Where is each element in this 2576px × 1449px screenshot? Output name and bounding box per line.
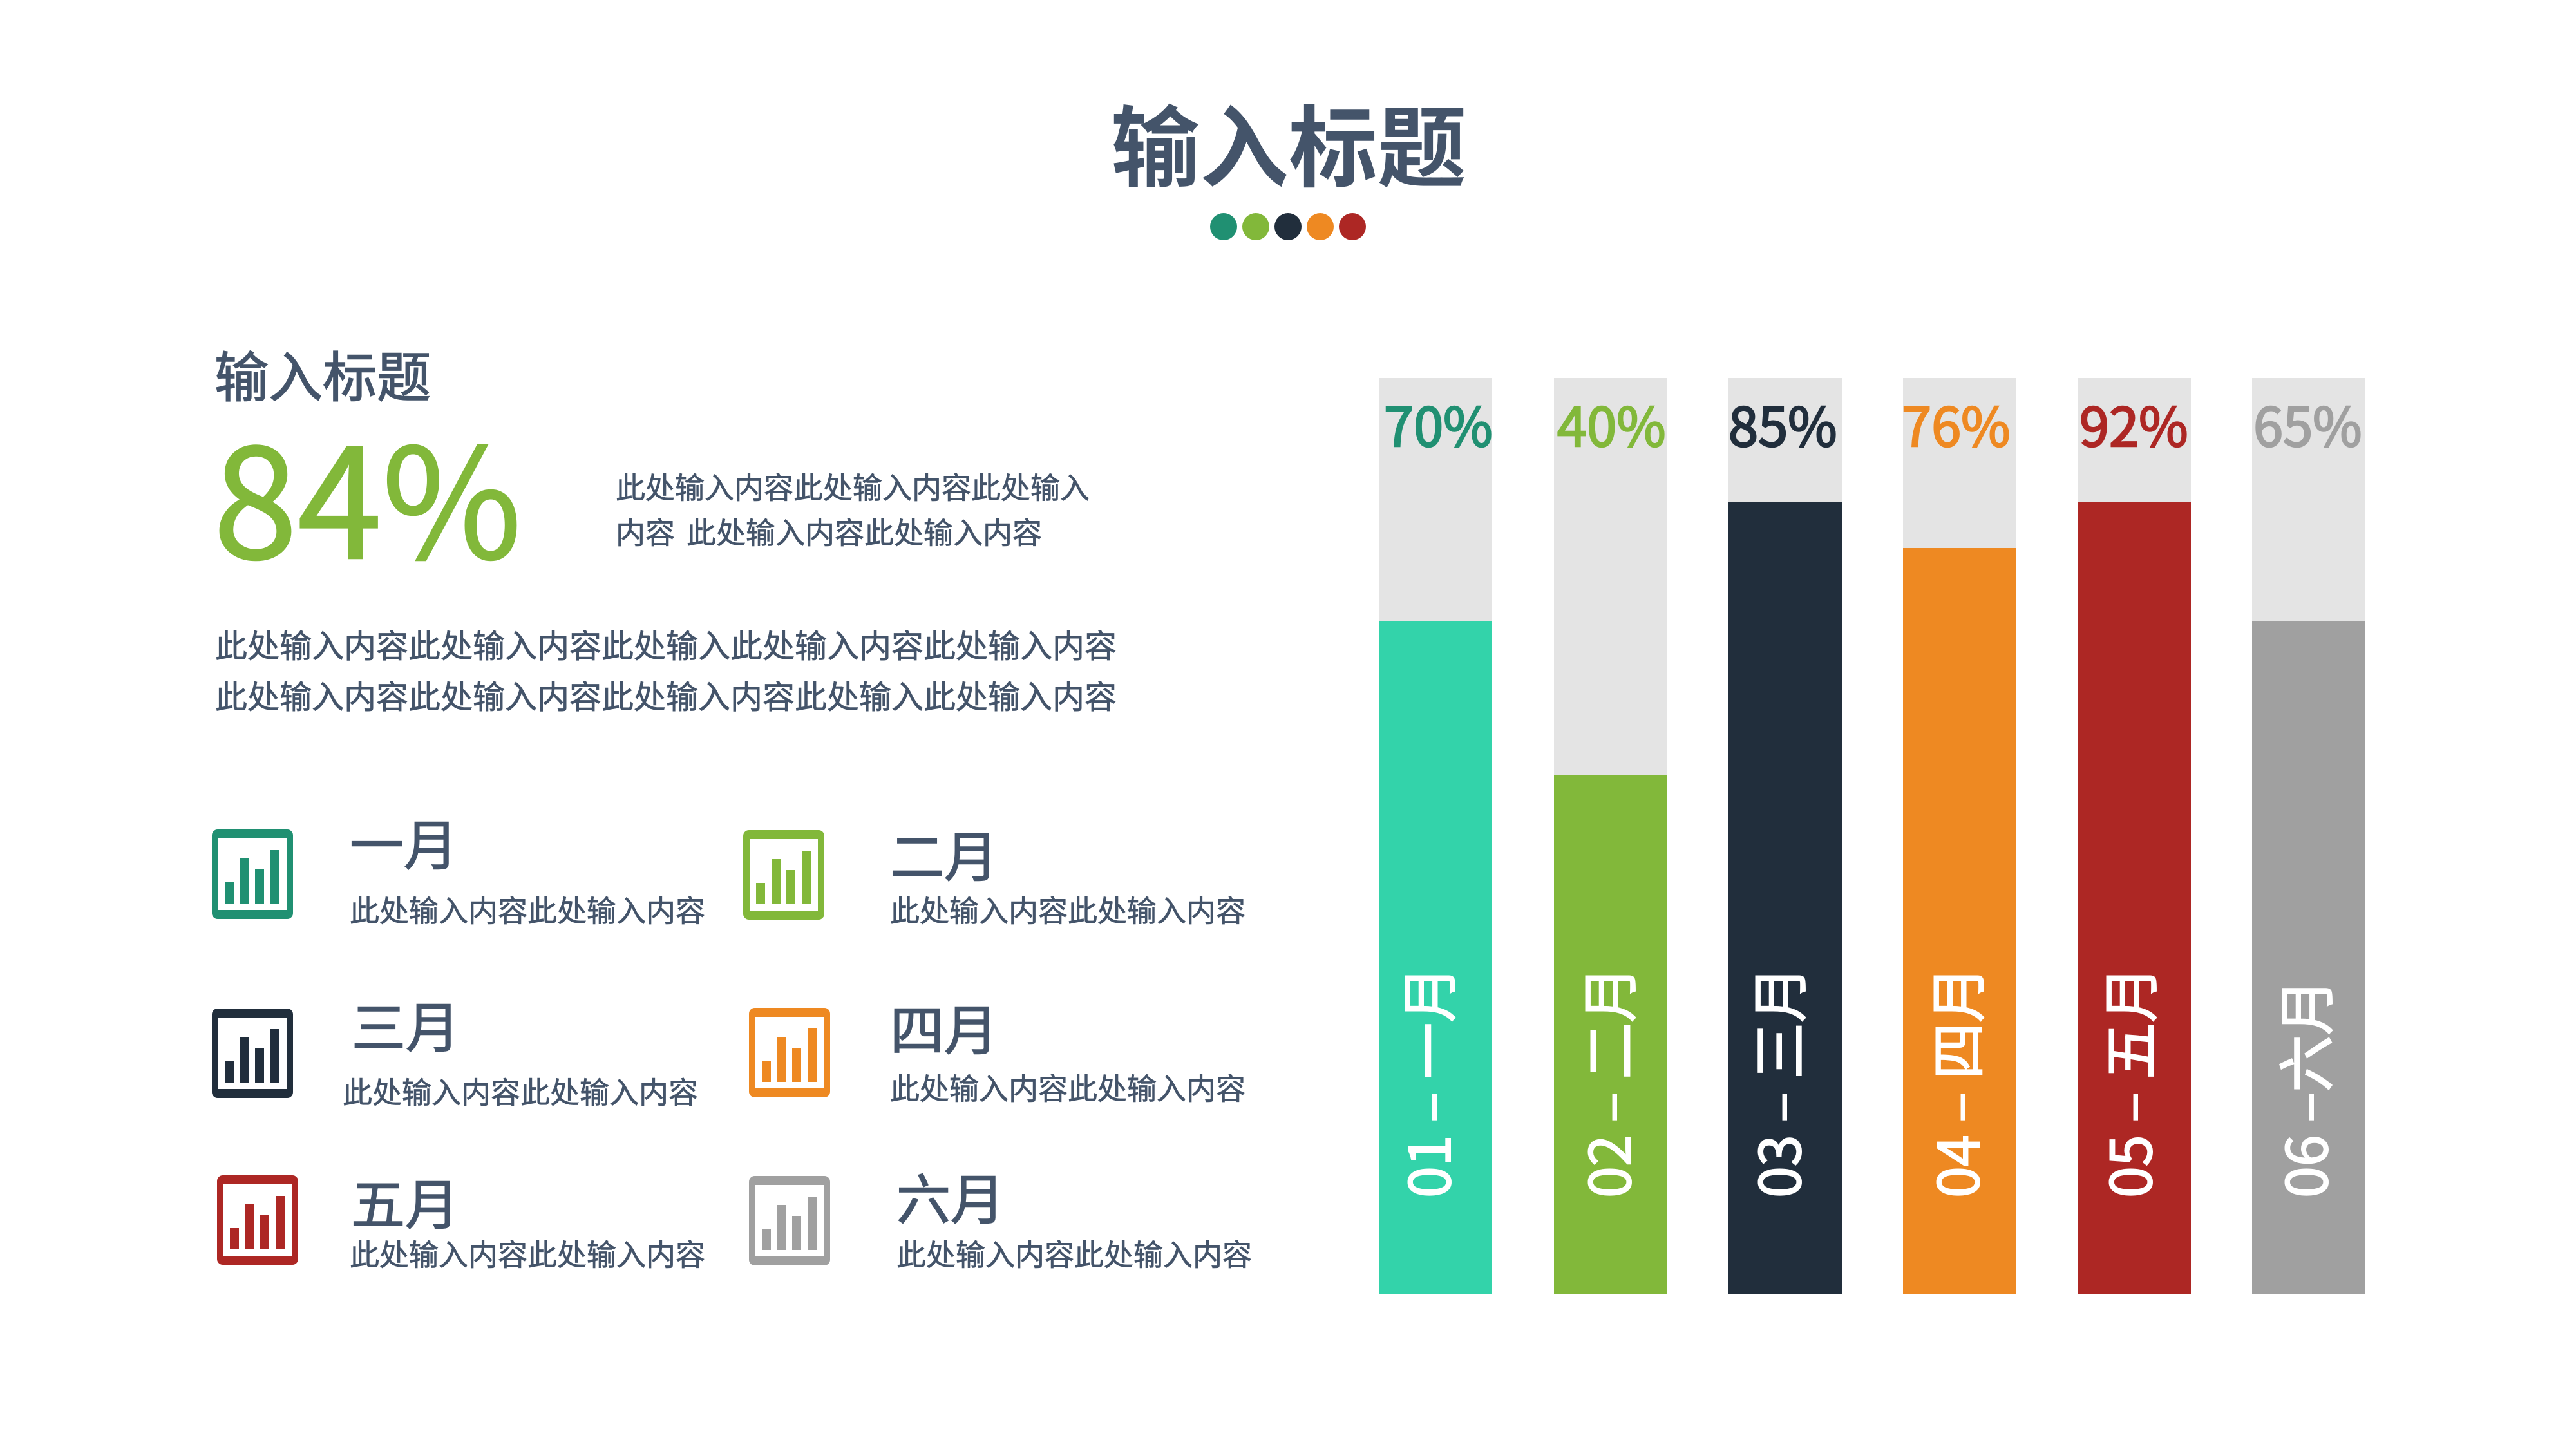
bar: February xyxy=(1554,378,1667,1294)
title: 输入标题 xyxy=(1111,77,1466,205)
bar: April xyxy=(1902,378,2016,1294)
title dots xyxy=(1210,213,1366,240)
body paragraph: 此处输入内容此处输入内容此处输入此处输入内容此处输入内容 xyxy=(215,621,1117,667)
May description: 此处输入内容此处输入内容 xyxy=(350,1232,705,1274)
bar: January xyxy=(1379,378,1493,1294)
bar: May: 92% xyxy=(2079,384,2188,462)
bar: April: 76% xyxy=(1902,384,2011,462)
January description: 此处输入内容此处输入内容 xyxy=(350,888,705,931)
bar: February: 40% xyxy=(1557,384,1666,462)
bar: May xyxy=(2078,378,2191,1294)
body paragraph xyxy=(215,621,1117,718)
February heading: 二月 xyxy=(890,815,998,893)
icon: April chart xyxy=(749,1008,830,1097)
bar: March xyxy=(1728,378,1842,1294)
May heading: 五月 xyxy=(351,1162,459,1240)
April description: 此处输入内容此处输入内容 xyxy=(890,1066,1245,1108)
stat description: 内容 此处输入内容此处输入内容 xyxy=(616,510,1042,553)
icon: May chart xyxy=(217,1175,298,1265)
stat description xyxy=(616,465,1090,553)
bar: January: 01 – 一月 xyxy=(1385,966,1467,1198)
bar: March: 85% xyxy=(1728,384,1837,462)
bar: January: 70% xyxy=(1384,384,1493,462)
icon: January chart xyxy=(212,829,293,919)
body paragraph: 此处输入内容此处输入内容此处输入内容此处输入此处输入内容 xyxy=(215,672,1117,718)
panel: left summary xyxy=(213,335,1117,718)
March description: 此处输入内容此处输入内容 xyxy=(343,1070,698,1112)
icon: February chart xyxy=(743,830,824,920)
February description: 此处输入内容此处输入内容 xyxy=(890,888,1245,931)
bar: June: 65% xyxy=(2253,384,2362,462)
icon: June chart xyxy=(749,1176,830,1265)
bar: June xyxy=(2252,378,2365,1294)
bar: March: 03 – 三月 xyxy=(1736,966,1817,1198)
bar: May: 05 – 五月 xyxy=(2087,966,2168,1198)
April heading: 四月 xyxy=(890,988,998,1066)
panel: month legend xyxy=(212,803,1252,1274)
June description: 此处输入内容此处输入内容 xyxy=(896,1232,1252,1274)
January heading: 一月 xyxy=(350,803,458,881)
subheading: 输入标题 xyxy=(214,335,431,413)
big stat: 84% xyxy=(213,382,522,602)
March heading: 三月 xyxy=(352,985,460,1063)
bar chart xyxy=(1379,378,2365,1294)
June heading: 六月 xyxy=(896,1157,1005,1235)
bar: February: 02 – 二月 xyxy=(1566,966,1647,1198)
icon: March chart xyxy=(212,1009,293,1098)
bar: April: 04 – 四月 xyxy=(1914,966,1996,1198)
stat description: 此处输入内容此处输入内容此处输入 xyxy=(616,465,1090,507)
bar: June: 06 –六月 xyxy=(2262,978,2344,1198)
